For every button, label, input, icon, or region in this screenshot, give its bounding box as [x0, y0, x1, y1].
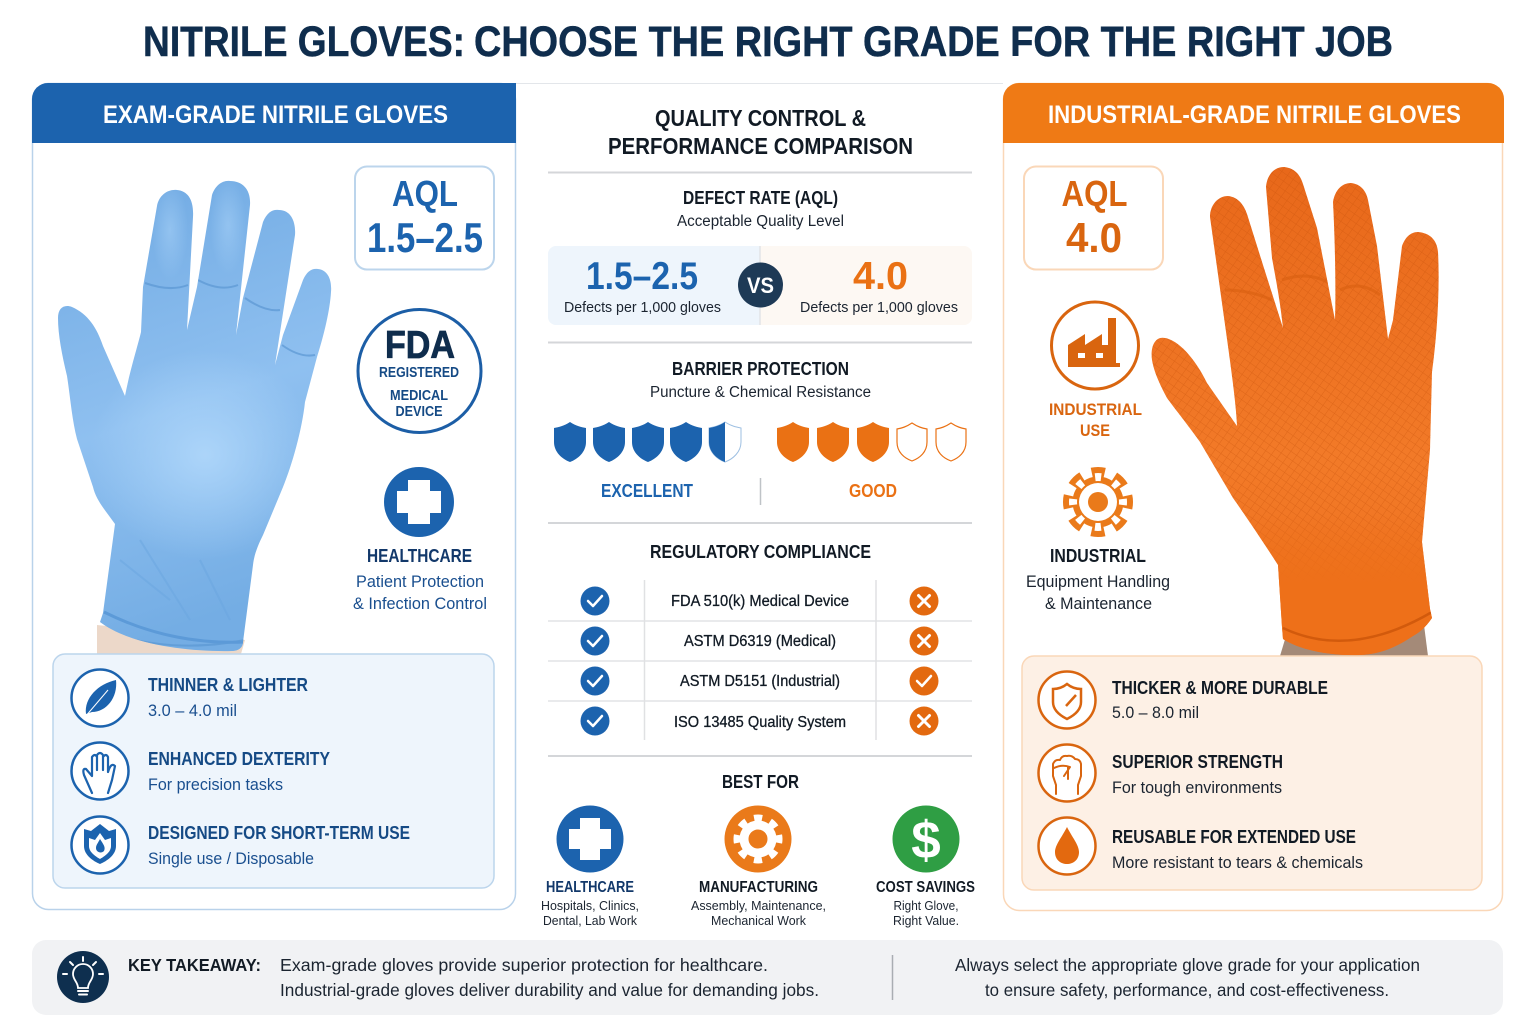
panel: exam-grade gloves: [32, 83, 516, 910]
badge: FDA registered medical device: DEVICE: [396, 404, 443, 420]
comparison: defect rates: Defects per 1,000 gloves: [800, 299, 958, 316]
rating: exam-grade shields: [554, 422, 741, 462]
best for: cost savings: [876, 806, 975, 928]
row: ASTM D6319: ASTM D6319 (Medical): [684, 633, 836, 650]
feature: thicker and more durable: THICKER & MORE DURABLE: [1112, 677, 1328, 698]
feature: thinner and lighter: THINNER & LIGHTER: [148, 674, 308, 695]
row: ASTM D6319: [580, 626, 938, 656]
title: [143, 18, 1393, 66]
AQL badge: exam-grade: AQL: [392, 173, 458, 214]
icon: shield drop: [72, 816, 128, 874]
feature: superior strength: For tough environments: [1112, 778, 1282, 797]
feature: enhanced dexterity: ENHANCED DEXTERITY: [148, 748, 331, 769]
badge: FDA registered medical device: [358, 310, 481, 432]
icon: light bulb: [57, 951, 109, 1003]
rating: industrial-grade shields: [777, 422, 966, 462]
icon: hand: [72, 742, 128, 800]
feature: short-term use: Single use / Disposable: [148, 849, 314, 868]
feature: thicker and more durable: 5.0 – 8.0 mil: [1112, 703, 1199, 722]
best for: healthcare: [541, 806, 639, 928]
feature: reusable: More resistant to tears & chemicals: [1112, 853, 1363, 872]
comparison: defect rates: [548, 246, 972, 325]
section heading: defect rate: Acceptable Quality Level: [677, 213, 844, 230]
feature: thinner and lighter: 3.0 – 4.0 mil: [148, 701, 237, 720]
feature: enhanced dexterity: For precision tasks: [148, 775, 283, 794]
feature: reusable: REUSABLE FOR EXTENDED USE: [1112, 826, 1356, 847]
icon: fist: [1038, 744, 1096, 802]
rating labels: EXCELLENT: [601, 481, 693, 501]
icon: vs badge: VS: [747, 273, 774, 298]
best for: healthcare: Dental, Lab Work: [543, 914, 638, 928]
row: FDA 510(k): [580, 586, 938, 616]
section heading: barrier protection: BARRIER PROTECTION: [672, 359, 849, 379]
AQL badge: industrial-grade: AQL: [1062, 173, 1128, 214]
feature: thinner and lighter: [148, 674, 308, 720]
row: ASTM D5151: [580, 666, 938, 696]
text: healthcare use: Patient Protection: [356, 573, 484, 591]
best for: cost savings: $: [911, 811, 941, 870]
icon: feather: [72, 670, 128, 726]
row: ISO 13485: ISO 13485 Quality System: [674, 714, 846, 731]
text: takeaway message: [280, 955, 819, 1000]
section heading: defect rate: [677, 188, 844, 230]
best for: manufacturing: [691, 806, 826, 928]
rating labels: [601, 481, 897, 501]
text: healthcare use: [353, 546, 487, 613]
icon: factory: [1052, 302, 1138, 389]
text: industrial use: INDUSTRIAL: [1049, 400, 1142, 419]
text: industrial application: INDUSTRIAL: [1050, 546, 1146, 566]
text: industrial use: [1049, 400, 1142, 440]
row: FDA 510(k): FDA 510(k) Medical Device: [671, 593, 849, 610]
best for: healthcare: HEALTHCARE: [546, 879, 634, 896]
AQL badge: industrial-grade: [1024, 166, 1163, 270]
text: industrial application: [1026, 546, 1170, 613]
feature: thicker and more durable: [1112, 677, 1328, 722]
badge: FDA registered medical device: MEDICAL: [390, 388, 448, 404]
panel: quality control comparison: [541, 105, 975, 928]
best for: healthcare: Hospitals, Clinics,: [541, 899, 639, 913]
feature: reusable: [1112, 826, 1363, 872]
panel header: industrial-grade: INDUSTRIAL-GRADE NITRILE GLOVES: [1048, 101, 1461, 129]
title: CHOOSE THE RIGHT GRADE FOR THE RIGHT JOB: [474, 18, 1393, 66]
photo: blue nitrile glove: [58, 175, 331, 654]
icon: drop: [1038, 818, 1096, 874]
text: healthcare use: & Infection Control: [353, 595, 487, 613]
section heading: defect rate: DEFECT RATE (AQL): [683, 188, 838, 208]
panel: industrial-grade gloves: [1003, 83, 1504, 910]
text: industrial application: & Maintenance: [1045, 595, 1152, 613]
text: takeaway message: Industrial-grade gloves deliver durability and value for demanding jobs.: [280, 980, 819, 1000]
icon: vs badge: [738, 262, 783, 308]
icon: shield check: [1038, 672, 1096, 728]
AQL badge: industrial-grade: 4.0: [1066, 214, 1122, 261]
feature: superior strength: SUPERIOR STRENGTH: [1112, 751, 1283, 772]
section heading: barrier protection: Puncture & Chemical Resistance: [650, 384, 871, 401]
text: takeaway message: Exam-grade gloves provide superior protection for healthcare.: [280, 955, 768, 975]
panel header: exam-grade: EXAM-GRADE NITRILE GLOVES: [103, 101, 448, 129]
icon: healthcare cross: [384, 467, 454, 537]
section heading: regulatory compliance: REGULATORY COMPLIANCE: [650, 542, 871, 562]
badge: FDA registered medical device: FDA: [385, 324, 455, 367]
features box: exam-grade: [53, 654, 494, 888]
compliance table: [548, 580, 972, 740]
comparison: defect rates: 4.0: [853, 255, 908, 298]
best for: cost savings: Right Value.: [893, 914, 959, 928]
text: key takeaway label: KEY TAKEAWAY:: [128, 955, 261, 975]
comparison: defect rates: 1.5–2.5: [586, 255, 698, 298]
text: industrial application: Equipment Handling: [1026, 573, 1170, 591]
heading: comparison: [608, 105, 913, 159]
heading: comparison: PERFORMANCE COMPARISON: [608, 133, 913, 159]
text: industrial use: USE: [1080, 421, 1110, 440]
row: ISO 13485: [580, 706, 938, 736]
AQL badge: exam-grade: 1.5–2.5: [367, 214, 483, 261]
best for: cost savings: COST SAVINGS: [876, 879, 975, 896]
key takeaway bar: [32, 940, 1503, 1015]
icon: gear: [1062, 466, 1134, 538]
rating labels: GOOD: [849, 481, 897, 501]
AQL badge: exam-grade: [355, 166, 494, 270]
best for: manufacturing: Mechanical Work: [711, 914, 807, 928]
comparison: defect rates: Defects per 1,000 gloves: [564, 299, 721, 316]
photo: orange nitrile glove: [1150, 160, 1445, 660]
best for: manufacturing: Assembly, Maintenance,: [691, 899, 826, 913]
features box: industrial-grade: [1022, 656, 1482, 890]
text: selection advice: [955, 955, 1420, 1000]
feature: short-term use: DESIGNED FOR SHORT-TERM USE: [148, 822, 410, 843]
text: healthcare use: HEALTHCARE: [367, 546, 472, 566]
best for: cost savings: Right Glove,: [894, 899, 958, 913]
title: NITRILE GLOVES:: [143, 18, 465, 66]
text: selection advice: Always select the appropriate glove grade for your application: [955, 955, 1420, 975]
feature: enhanced dexterity: [148, 748, 331, 794]
feature: short-term use: [148, 822, 410, 868]
panel header: industrial-grade: [1003, 83, 1504, 143]
text: selection advice: to ensure safety, performance, and cost-effectiveness.: [985, 980, 1389, 1000]
feature: superior strength: [1112, 751, 1283, 797]
panel header: exam-grade: [32, 83, 516, 143]
section heading: barrier protection: [650, 359, 871, 401]
best for: manufacturing: MANUFACTURING: [699, 879, 818, 896]
badge: FDA registered medical device: REGISTERED: [379, 365, 459, 381]
section heading: best for: BEST FOR: [722, 772, 799, 792]
heading: comparison: QUALITY CONTROL &: [655, 105, 866, 131]
row: ASTM D5151: ASTM D5151 (Industrial): [680, 673, 840, 690]
